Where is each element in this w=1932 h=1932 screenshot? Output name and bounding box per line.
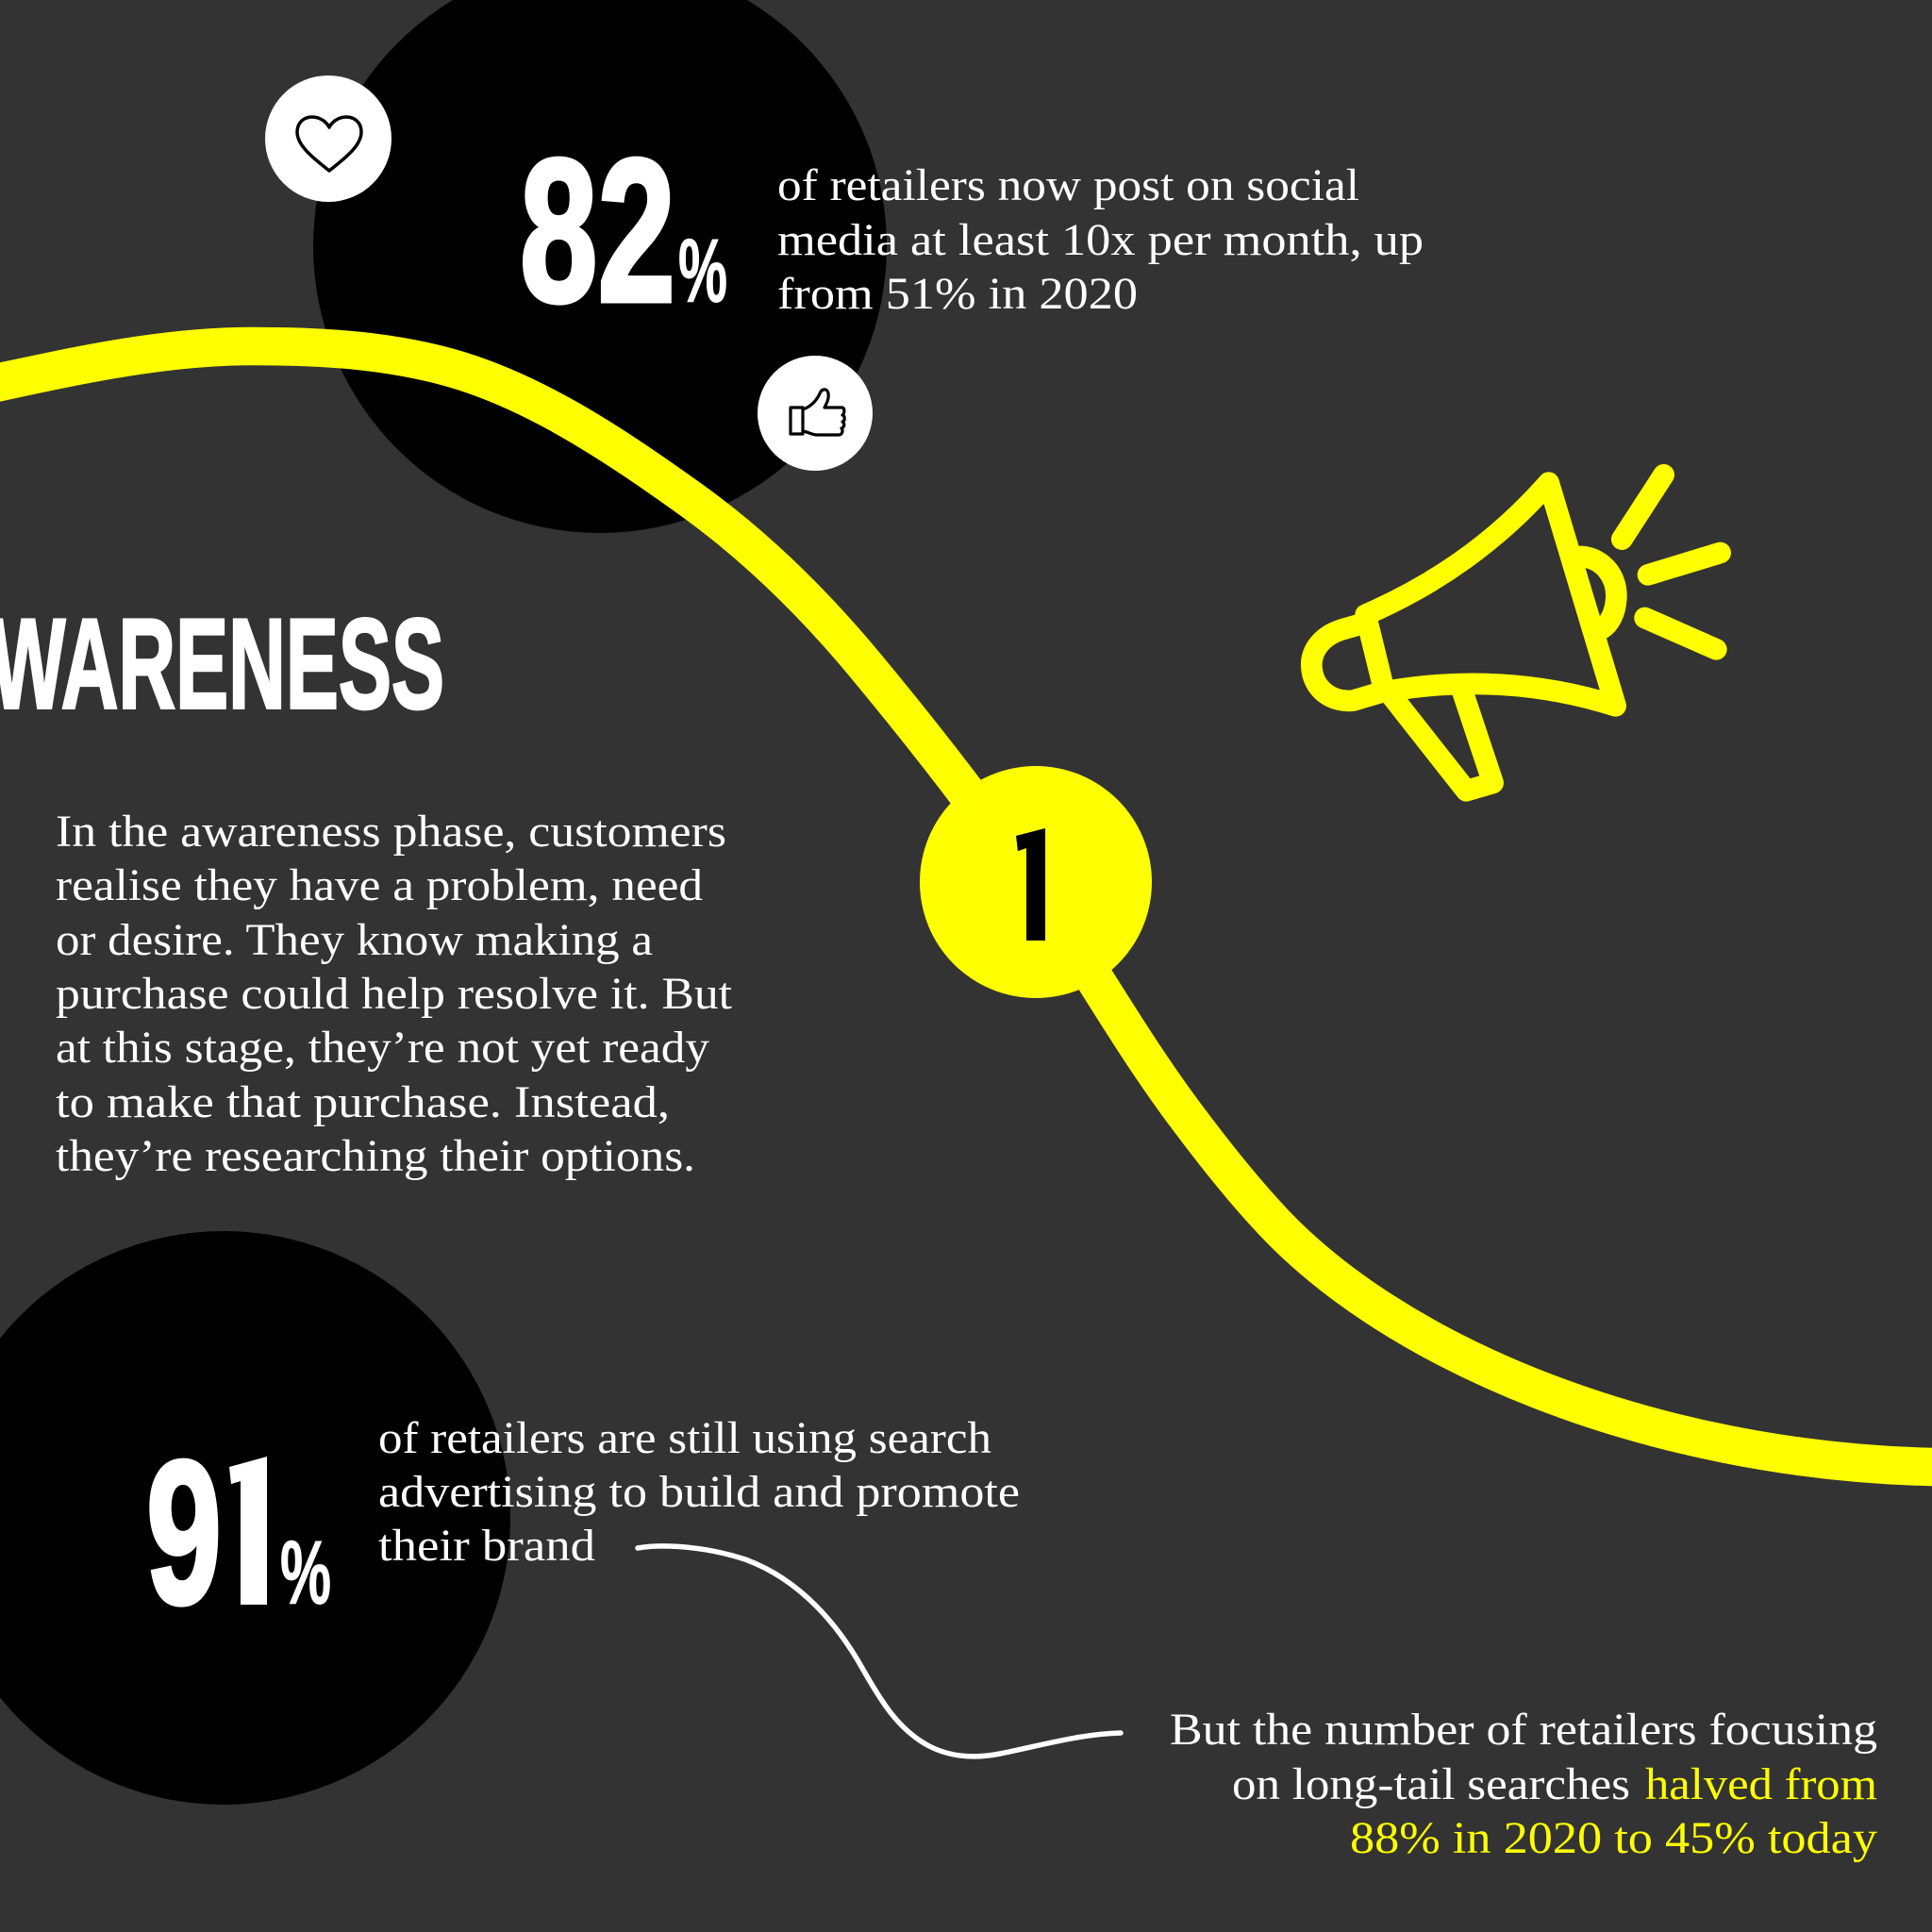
stat: 91%: 1 — [222, 1420, 278, 1648]
black circle: search stat backdrop — [0, 1231, 510, 1805]
text: search advertising stat description: of retailers are still using search — [378, 1413, 991, 1463]
text: awareness phase description: at this stage, they’re not yet ready — [56, 1023, 709, 1073]
text: long-tail search callout — [1170, 1705, 1877, 1863]
text: social media stat description: of retailers now post on social — [777, 160, 1359, 210]
text: awareness phase description: In the awareness phase, customers — [56, 807, 726, 857]
text: social media stat description: media at least 10x per month, up — [777, 215, 1424, 265]
icon: heart badge — [265, 75, 391, 202]
yellow journey line — [0, 346, 1932, 1468]
stat: 91% — [149, 1457, 330, 1607]
text: awareness phase description: purchase could help resolve it. But — [56, 969, 733, 1019]
step number badge — [920, 766, 1152, 998]
text: social media stat description: from 51% in 2020 — [777, 269, 1138, 319]
stat: 91%: 9 — [146, 1418, 222, 1646]
text: awareness phase description: they’re researching their options. — [56, 1131, 695, 1181]
text: search advertising stat description: their brand — [378, 1521, 595, 1571]
connector line — [638, 1546, 1121, 1757]
text: search advertising stat description: advertising to build and promote — [378, 1467, 1020, 1517]
stat: 91%: % — [280, 1523, 331, 1624]
text: long-tail search callout: 88% in 2020 to 45% today — [1350, 1813, 1877, 1863]
text: awareness phase description: or desire. They know making a — [56, 915, 653, 965]
stat: 82%: 82 — [520, 116, 675, 344]
text: awareness phase description — [56, 807, 733, 1181]
icon: thumbs up badge — [758, 356, 873, 471]
text: long-tail search callout: But the number of retailers focusing — [1170, 1705, 1877, 1755]
step number badge: 1 — [1008, 800, 1055, 974]
icon: megaphone — [1311, 475, 1721, 791]
stat: 82%: % — [678, 221, 727, 322]
text: social media stat description — [777, 160, 1424, 319]
text: search advertising stat description — [378, 1413, 1020, 1571]
text: awareness phase description: realise they have a problem, need — [56, 860, 703, 910]
text: awareness phase description: to make that purchase. Instead, — [56, 1077, 670, 1127]
text: long-tail search callout: halved from — [1645, 1759, 1877, 1809]
black circle: social stat backdrop — [313, 0, 887, 533]
text: long-tail search callout: on long-tail searches — [1232, 1759, 1630, 1809]
